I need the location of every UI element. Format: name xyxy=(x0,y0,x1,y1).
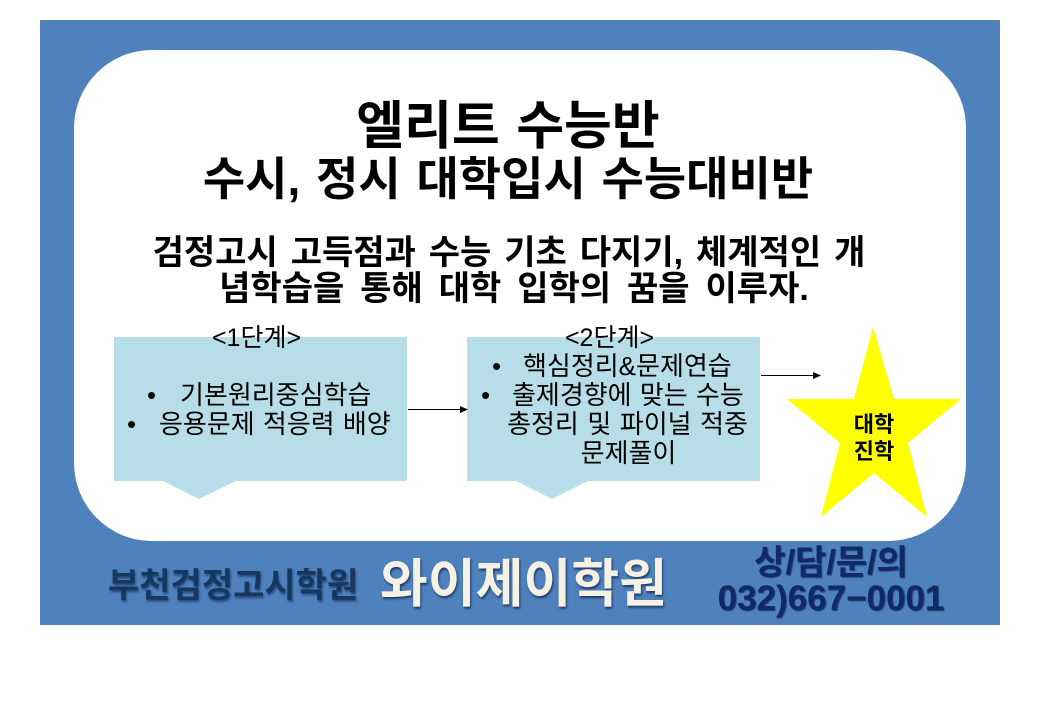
step 1 bullet text: • xyxy=(127,409,136,439)
step 1 bullet text xyxy=(127,380,391,439)
step 1 bullet text: 응용문제 적응력 배양 xyxy=(159,409,391,439)
academy subtitle: 부천검정고시학원 xyxy=(108,567,358,605)
title line 1: 엘리트 수능반 xyxy=(356,98,660,156)
description line 2: 념학습을 통해 대학 입학의 꿈을 이루자. xyxy=(219,270,809,308)
star: university entrance xyxy=(787,327,961,517)
consultation label: 상/담/문/의 xyxy=(754,544,908,582)
arrow: step 2 to star xyxy=(761,372,821,379)
phone number: 032)667−0001 xyxy=(718,579,944,618)
step 2 bullet text: 총정리 및 파이널 적중 xyxy=(507,409,748,439)
title line 2: 수시, 정시 대학입시 수능대비반 xyxy=(203,153,813,205)
step 2 bullet text xyxy=(481,351,748,468)
step 2 bullet text: • xyxy=(481,380,490,410)
academy name: 와이제이학원 xyxy=(380,556,667,614)
step 2 bullet text: 출제경향에 맞는 수능 xyxy=(512,380,744,410)
arrow: step 1 to step 2 xyxy=(408,406,468,413)
white rounded panel xyxy=(74,50,966,541)
step 2 bullet text: • xyxy=(492,351,501,381)
star label: 대학 진학 xyxy=(854,412,894,464)
step 1 bullet text: 기본원리중심학습 xyxy=(180,380,371,410)
step 2 bullet text: 문제풀이 xyxy=(581,438,676,468)
step 1 bullet text: • xyxy=(147,380,156,410)
step 2 bullet text: 핵심정리&문제연습 xyxy=(523,351,732,381)
step 2 label: <2단계> xyxy=(565,324,654,352)
step 1 callout box xyxy=(114,337,407,499)
step 2 callout box xyxy=(467,337,760,499)
blue background panel xyxy=(40,20,1000,625)
description line 1: 검정고시 고득점과 수능 기초 다지기, 체계적인 개 xyxy=(153,234,865,272)
step 1 label: <1단계> xyxy=(212,324,301,352)
